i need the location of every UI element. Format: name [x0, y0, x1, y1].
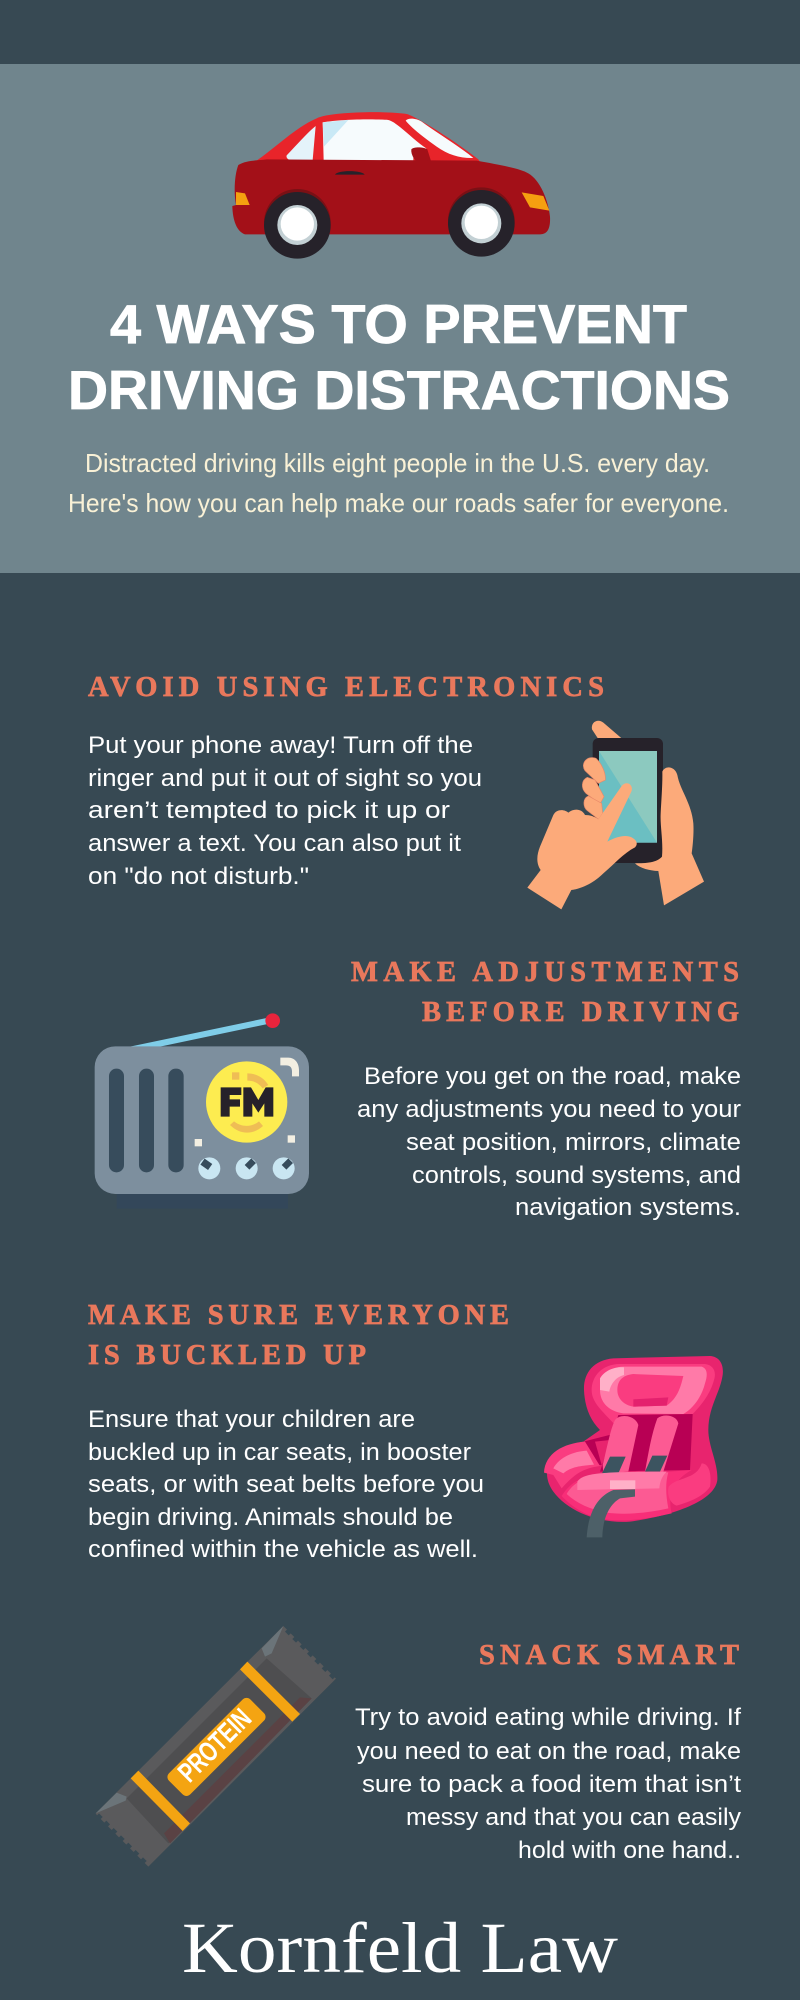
text block: avoid using electronics: Put your phone away! Turn off the: [88, 732, 473, 759]
text block: avoid using electronics: answer a text. You can also put it: [88, 830, 461, 857]
heading: avoid using electronics: AVOID USING ELECTRONICS: [88, 672, 604, 703]
icon: FM radio: [95, 1013, 309, 1209]
text block: snack smart: you need to eat on the road, make: [357, 1738, 741, 1765]
text block: make adjustments: [357, 1063, 741, 1221]
text block: buckled up: seats, or with seat belts before you: [88, 1471, 484, 1498]
heading: make sure everyone is buckled up: IS BUCKLED UP: [88, 1340, 366, 1371]
text block: buckled up: begin driving. Animals should be: [88, 1504, 453, 1531]
text block: snack smart: messy and that you can easily: [406, 1804, 742, 1831]
icon: child car seat: [544, 1356, 723, 1537]
icon: red car: [232, 112, 550, 259]
heading: make adjustments before driving: [351, 957, 739, 1028]
text block: make adjustments: controls, sound systems, and: [412, 1162, 741, 1189]
text block: buckled up: Ensure that your children are: [88, 1406, 415, 1433]
subtitle text: [68, 448, 729, 518]
subtitle text: Distracted driving kills eight people in the U.S. every day.: [85, 448, 710, 478]
heading: make adjustments before driving: BEFORE DRIVING: [422, 997, 739, 1028]
text block: make adjustments: navigation systems.: [515, 1194, 741, 1221]
icon: hands holding phone: [527, 721, 704, 909]
text block: avoid using electronics: ringer and put it out of sight so you: [88, 765, 482, 792]
text block: avoid using electronics: [88, 732, 482, 890]
text block: make adjustments: Before you get on the road, make: [364, 1063, 741, 1090]
footer: Kornfeld Law: Kornfeld Law: [182, 1908, 618, 1988]
heading: make adjustments before driving: MAKE ADJUSTMENTS: [351, 957, 739, 988]
text block: avoid using electronics: aren’t tempted to pick it up or: [88, 797, 450, 824]
heading: snack smart: SNACK SMART: [479, 1640, 739, 1671]
subtitle text: Here's how you can help make our roads safer for everyone.: [68, 488, 729, 518]
text block: buckled up: confined within the vehicle as well.: [88, 1536, 478, 1563]
title: [68, 293, 730, 421]
text block: snack smart: sure to pack a food item that isn’t: [362, 1771, 741, 1798]
text block: snack smart: [355, 1704, 742, 1864]
title: 4 WAYS TO PREVENT: [110, 293, 687, 355]
icon: protein bar: PROTEIN: [172, 1702, 257, 1788]
text block: make adjustments: any adjustments you need to your: [357, 1096, 741, 1123]
text block: buckled up: buckled up in car seats, in booster: [88, 1439, 471, 1466]
text block: make adjustments: seat position, mirrors, climate: [406, 1129, 741, 1156]
icon: protein bar: [96, 1626, 336, 1867]
title: DRIVING DISTRACTIONS: [68, 359, 730, 421]
text block: snack smart: hold with one hand..: [518, 1837, 741, 1864]
heading: make sure everyone is buckled up: [88, 1300, 509, 1371]
text block: snack smart: Try to avoid eating while driving. If: [355, 1704, 741, 1731]
text block: avoid using electronics: on "do not disturb.": [88, 863, 309, 890]
heading: make sure everyone is buckled up: MAKE SURE EVERYONE: [88, 1300, 509, 1331]
text block: buckled up: [88, 1406, 484, 1563]
panel: header band: [0, 64, 800, 573]
